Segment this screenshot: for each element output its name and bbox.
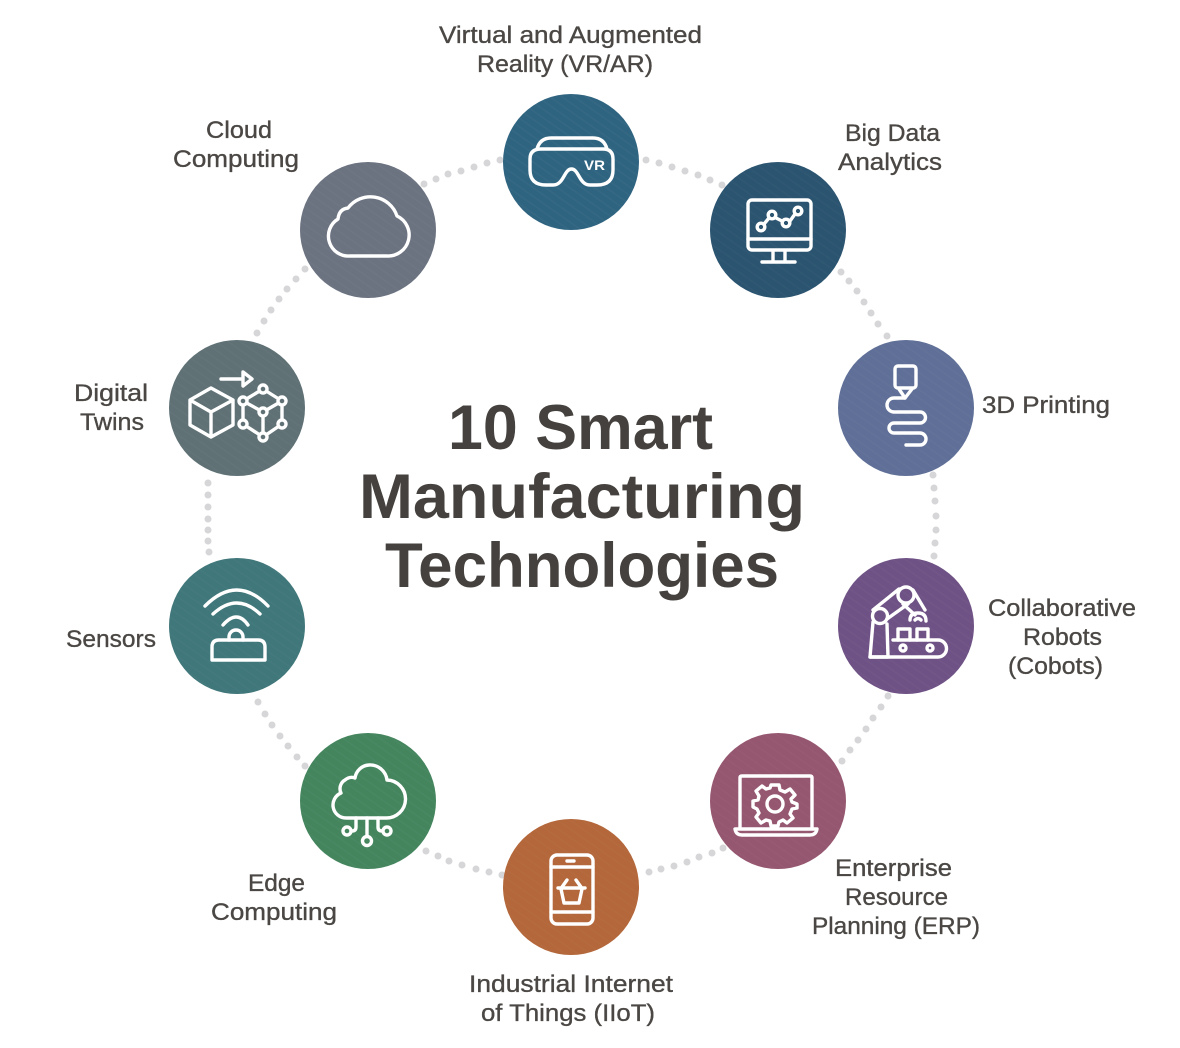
label: Edge Computing xyxy=(211,870,337,926)
icon: smartphone with basket xyxy=(551,855,593,924)
title: Technologies xyxy=(385,531,779,601)
node: 3D Printing xyxy=(838,340,974,476)
label: Virtual and Augmented Reality xyxy=(439,22,702,78)
node: Industrial Internet of Things xyxy=(503,819,639,955)
label: Enterprise Resource Planning xyxy=(812,855,980,940)
label: Digital Twins: Twins xyxy=(80,409,144,436)
label: Industrial Internet of Things: Industrial Internet xyxy=(469,971,673,998)
node: Collaborative Robots xyxy=(838,558,974,694)
label: Collaborative Robots xyxy=(988,595,1136,680)
icon: VR headset: VR xyxy=(584,157,605,173)
label: Big Data Analytics: Analytics xyxy=(838,149,942,176)
label: Collaborative Robots: (Cobots) xyxy=(1008,653,1103,680)
label: 3D Printing: 3D Printing xyxy=(982,392,1110,419)
label: Big Data Analytics xyxy=(838,120,942,176)
label: Edge Computing: Computing xyxy=(211,899,337,926)
label: Cloud Computing: Cloud xyxy=(206,117,272,144)
label: Digital Twins: Digital xyxy=(74,380,148,407)
label: Digital Twins xyxy=(74,380,148,436)
label: Industrial Internet of Things: of Things (IIoT) xyxy=(481,1000,655,1027)
label: Collaborative Robots: Collaborative xyxy=(988,595,1136,622)
icon: cloud xyxy=(328,197,409,256)
node: Digital Twins xyxy=(169,340,305,476)
label: Virtual and Augmented Reality: Reality (VR/AR) xyxy=(477,51,653,78)
node: Cloud Computing xyxy=(300,162,436,298)
label: Sensors: Sensors xyxy=(66,626,156,653)
label: Edge Computing: Edge xyxy=(248,870,305,897)
icon: 3D printer nozzle and filament xyxy=(887,366,926,445)
title: 10 Smart xyxy=(448,393,713,463)
label: Industrial Internet of Things xyxy=(469,971,673,1027)
node: Edge Computing xyxy=(300,733,436,869)
node: Big Data Analytics xyxy=(710,162,846,298)
label: Enterprise Resource Planning: Resource xyxy=(845,884,948,911)
dotted ring connecting the circles xyxy=(204,156,940,878)
title xyxy=(359,393,805,601)
label: Big Data Analytics: Big Data xyxy=(845,120,941,147)
node: Sensors xyxy=(169,558,305,694)
icon: cube and wireframe twin xyxy=(190,372,286,441)
label: Cloud Computing xyxy=(173,117,299,173)
icon: monitor with line graph xyxy=(748,200,811,262)
icon: wireless sensor xyxy=(205,590,268,660)
icon: cloud with circuit nodes xyxy=(333,765,406,846)
label: Enterprise Resource Planning: Planning (ERP) xyxy=(812,913,980,940)
label: Collaborative Robots: Robots xyxy=(1023,624,1102,651)
icon: laptop with gear xyxy=(735,776,817,835)
label: Cloud Computing: Computing xyxy=(173,146,299,173)
icon: robot arm and conveyor xyxy=(870,587,946,657)
node: Enterprise Resource Planning xyxy=(710,733,846,869)
label: Enterprise Resource Planning: Enterprise xyxy=(835,855,952,882)
label: Virtual and Augmented Reality: Virtual and Augmented xyxy=(439,22,702,49)
node: Virtual and Augmented Reality xyxy=(503,94,639,230)
title: Manufacturing xyxy=(359,462,805,532)
